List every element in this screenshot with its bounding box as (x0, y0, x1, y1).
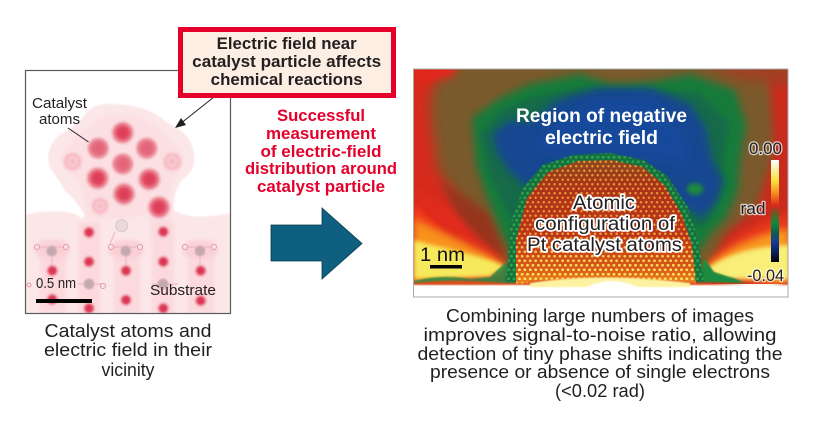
substrate strip (414, 284, 788, 297)
catalyst atoms (61, 120, 184, 220)
near-substrate heat (418, 198, 504, 264)
caption: right panel: (<0.02 rad) (555, 380, 645, 401)
caption: right panel: Combining large numbers of images (446, 305, 754, 326)
callout: electric field near catalyst: catalyst particle affects (192, 53, 381, 71)
label: catalyst atoms (32, 95, 88, 142)
caption: right panel (418, 305, 782, 401)
colour bar legend: 0.00 (749, 140, 782, 158)
scale bar: 1 nm: 1 nm (420, 245, 465, 266)
green ring (472, 74, 746, 250)
callout: electric field near catalyst (180, 30, 394, 96)
label: atomic configuration: configuration of (535, 214, 676, 235)
scale bar: 0.5 nm: 0.5 nm (36, 275, 76, 292)
caption: left panel: Catalyst atoms and (44, 320, 212, 341)
callout: electric field near catalyst: Electric field near (217, 35, 357, 53)
caption: left panel: electric field in their (44, 339, 212, 360)
negative field region (492, 88, 724, 218)
electric field halo (20, 104, 236, 320)
background field (414, 70, 788, 284)
panel: catalyst atoms and electric field (20, 70, 236, 320)
colour bar legend: rad (740, 200, 766, 218)
label: catalyst atoms: Catalyst (32, 95, 88, 112)
caption: left panel: vicinity (102, 359, 155, 380)
label: region of negative electric field: electric field (545, 128, 658, 149)
heading: successful measurement: of electric-field (260, 143, 382, 161)
caption: right panel: presence or absence of single electrons (430, 361, 770, 382)
heading: successful measurement: catalyst particle (257, 178, 385, 196)
label: atomic configuration (527, 193, 682, 256)
label: atomic configuration: Atomic (573, 193, 635, 214)
label: substrate: Substrate (150, 282, 216, 299)
caption: left panel (44, 320, 212, 380)
colour bar legend (740, 140, 784, 285)
caption: right panel: improves signal-to-noise ratio, allowing (424, 324, 776, 345)
atomic dome (505, 153, 704, 284)
scale bar: 0.5 nm (36, 275, 92, 303)
arrow: left to right (271, 208, 362, 279)
heading: successful measurement: Successful (277, 107, 365, 125)
label: catalyst atoms: atoms (39, 111, 80, 128)
caption: right panel: detection of tiny phase shifts indicating the (418, 343, 782, 364)
heading: successful measurement (245, 107, 397, 196)
colour bar legend: -0.04 (747, 267, 784, 285)
callout: electric field near catalyst: chemical reactions (211, 71, 363, 89)
label: atomic configuration: Pt catalyst atoms (527, 235, 682, 256)
label: region of negative electric field: Region of negative (516, 106, 687, 127)
heading: successful measurement: distribution around (245, 160, 397, 178)
heading: successful measurement: measurement (266, 125, 377, 143)
substrate atoms (27, 220, 216, 316)
label: region of negative electric field (516, 106, 687, 149)
arrow: callout to field (175, 97, 214, 128)
panel: phase map of Pt catalyst (413, 68, 788, 298)
